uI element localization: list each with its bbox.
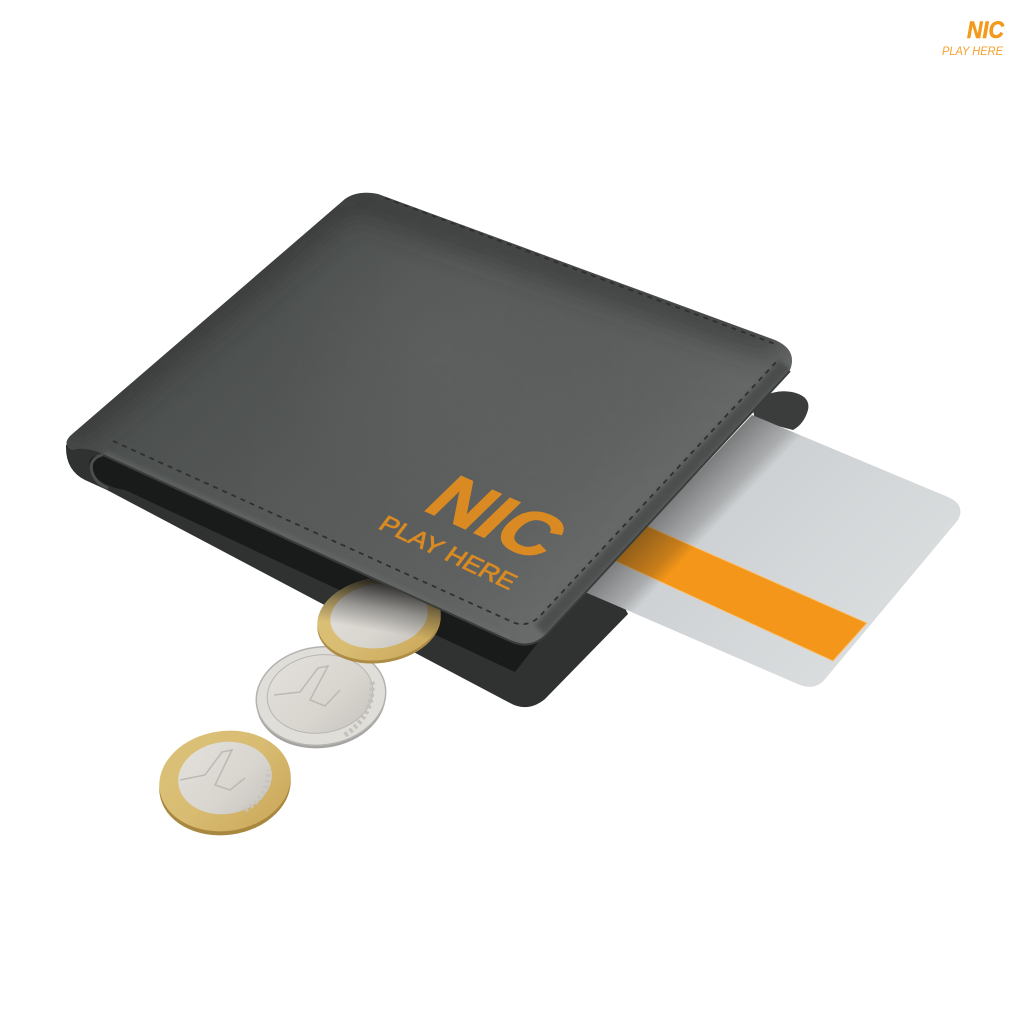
wallet strap tab behind card — [752, 391, 808, 430]
coin: middle silver — [250, 638, 392, 757]
wallet top cover — [66, 193, 792, 645]
illustration: wallet with card and coins — [66, 21, 1005, 836]
inner curl of wallet — [91, 454, 108, 488]
logo: top right: PLAY HERE — [942, 44, 1004, 58]
wallet inner opening — [89, 452, 540, 672]
coin: top gold, tucked under wallet — [312, 570, 446, 671]
card orange stripe — [613, 525, 867, 661]
wallet stitching — [113, 198, 778, 624]
embossed logo: PLAY HERE: PLAY HERE — [374, 511, 522, 595]
wallet lower body — [66, 430, 628, 707]
logo: top right — [942, 17, 1005, 58]
card — [586, 415, 960, 687]
logo: top right: NIC — [967, 17, 1005, 44]
coin: bottom bimetal — [153, 722, 297, 844]
embossed logo: NIC: NIC — [410, 464, 584, 572]
card shadow from wallet — [586, 415, 798, 612]
wallet dark lip shadow — [103, 371, 790, 645]
wallet cover edge shading — [66, 193, 792, 644]
